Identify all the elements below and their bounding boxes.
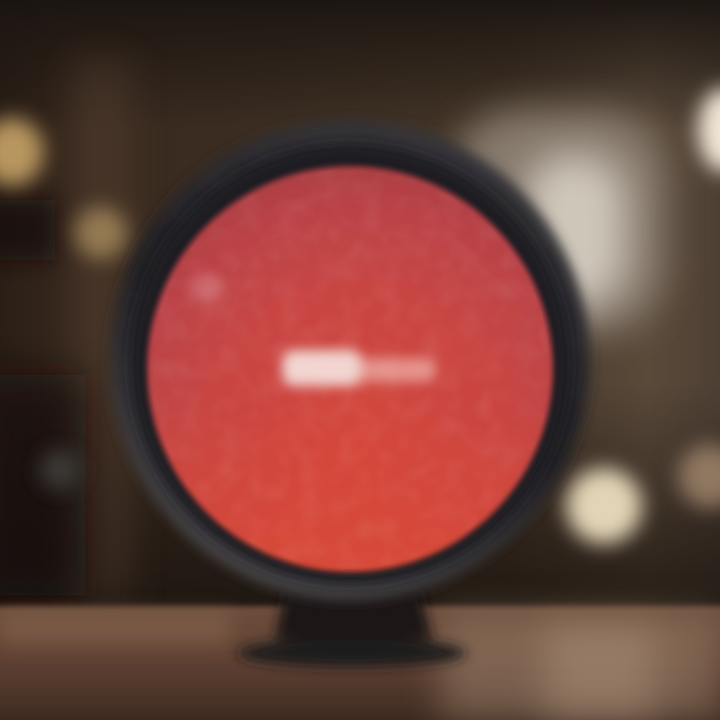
- glow behind the display: [450, 110, 665, 335]
- table surface: [0, 606, 720, 720]
- highlight spot: [193, 273, 223, 303]
- light: dim left: [40, 450, 80, 490]
- disc speckle texture: [160, 170, 513, 560]
- display stand: [238, 590, 466, 667]
- light: top left: [0, 118, 44, 186]
- light: left middle: [75, 207, 127, 259]
- red disc: [147, 166, 553, 572]
- bokeh lights: [0, 88, 720, 544]
- blurred label on the disc: [282, 350, 436, 386]
- light: top right: [698, 88, 720, 172]
- light: far right: [678, 444, 720, 508]
- display ring: [110, 120, 590, 600]
- light: lower right: [566, 468, 642, 544]
